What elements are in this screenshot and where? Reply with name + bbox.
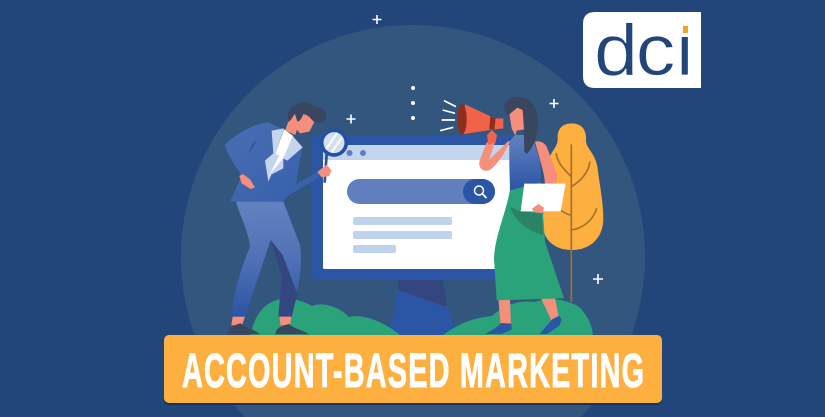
fingers [532,204,544,213]
fist [487,130,497,145]
skirt [494,182,564,300]
foliage [543,123,603,250]
legs [498,298,559,326]
banner shadow [164,337,662,405]
neck [285,122,298,135]
monitor stand [387,280,458,336]
logo panel [583,12,701,88]
monitor frame [312,135,516,280]
back leg [271,240,297,317]
browser title bar [323,145,513,160]
search button [463,179,495,204]
left hand [239,174,255,189]
right lapel [268,136,303,176]
megaphone bell [457,104,467,135]
banner title: ACCOUNT-BASED MARKETING [182,345,644,398]
woman with megaphone [440,97,566,334]
tablet [521,184,566,211]
skirt shadow [510,207,543,235]
jacket body [225,122,319,202]
result lines [353,217,452,253]
logo dot mask [677,20,692,35]
lens glare [326,133,342,152]
left bush [250,299,401,336]
browser dots [346,150,366,156]
sparkle plus signs [346,15,603,284]
megaphone cone [462,104,503,134]
shirt [268,129,293,177]
trunk and branches [552,144,597,302]
skin ankles [231,317,291,325]
background circle [181,25,645,417]
logo [583,10,701,91]
right hand [317,165,331,177]
hair [504,97,538,154]
megaphone band [489,116,496,130]
logo accent dot [683,26,688,33]
title banner [164,335,662,405]
front leg [231,202,301,317]
search bar [347,179,495,204]
hair [288,102,326,123]
tree [543,123,603,302]
right bush [442,299,593,336]
jacket crease [248,140,257,155]
shoes [485,316,562,334]
blouse [509,135,541,190]
right arm [533,141,557,212]
monitor [312,135,516,280]
sound lines [440,101,456,131]
lapel [265,128,284,182]
banner panel [164,335,662,403]
left arm [479,141,510,171]
magnifier handle [325,154,327,183]
head [288,113,314,133]
man with magnifying glass [225,102,346,334]
search icon [474,186,486,198]
magnifier lens [322,130,346,155]
monitor screen [323,145,513,269]
shoes [227,323,309,334]
face [509,108,524,136]
dotted accent [411,86,415,120]
logo wordmark: dci [594,10,694,91]
